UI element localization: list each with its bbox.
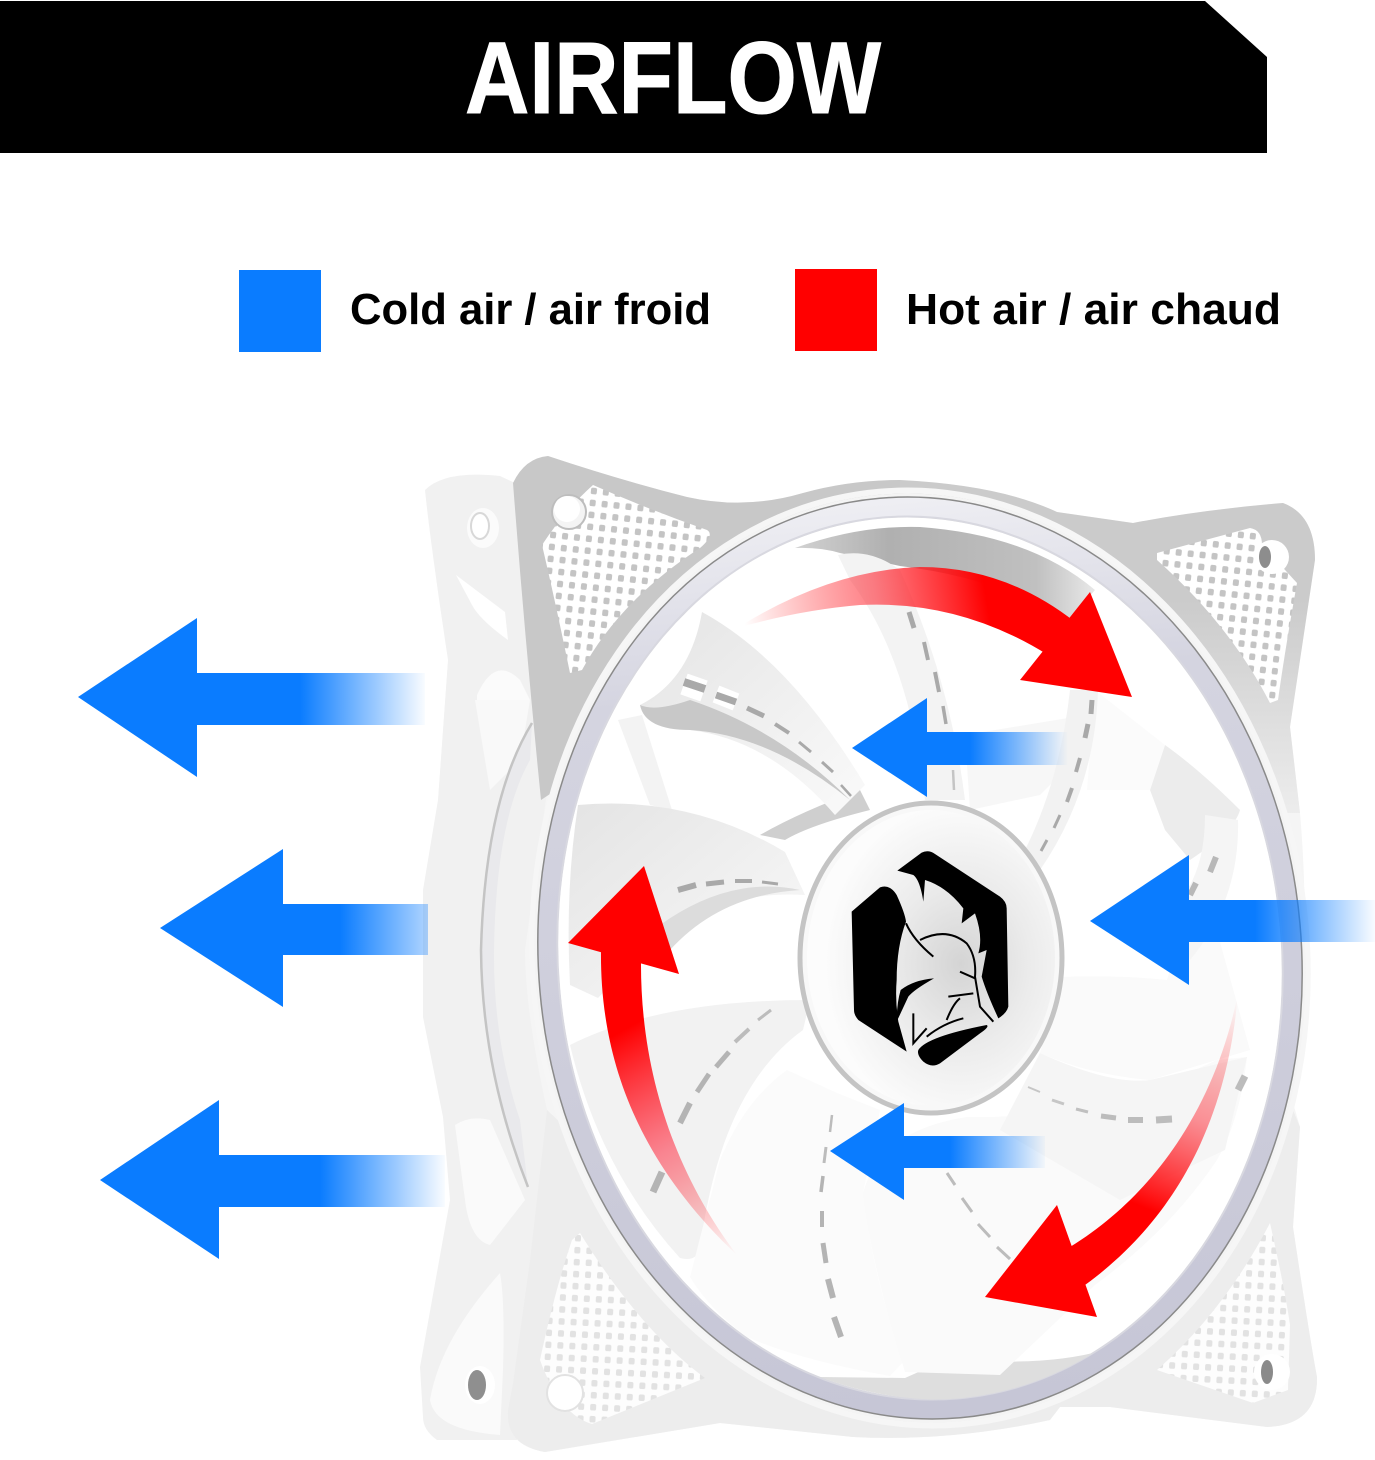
fan illustration	[420, 456, 1346, 1458]
blade: lower-right	[918, 1358, 1014, 1375]
mesh panel: bottom-left	[540, 1233, 705, 1424]
arrow: cold air through upper	[852, 698, 1068, 797]
blade: upper-left	[640, 612, 865, 815]
grey frame shading: top-right	[900, 480, 1315, 813]
legend: hot air: Hot air / air chaud	[906, 285, 1281, 334]
mesh panel: bottom-right	[1157, 1223, 1290, 1403]
fan blades	[569, 527, 1250, 1400]
fan hub	[800, 803, 1062, 1113]
blade strip: far right	[1189, 816, 1238, 900]
legend: cold air	[239, 270, 711, 352]
screw: bottom-left	[547, 1375, 583, 1411]
legend: cold air: Cold air / air froid	[350, 285, 711, 334]
bottom crescent shadow	[821, 1354, 1090, 1398]
arrow: cold air out bottom	[100, 1100, 445, 1259]
top crescent shadow	[795, 527, 1095, 622]
blade strip: upper right	[1025, 690, 1098, 870]
title: AIRFLOW	[465, 21, 882, 135]
blade: right lower band	[1008, 1054, 1228, 1151]
blade: left	[569, 804, 805, 998]
arrow: hot air left	[568, 866, 737, 1255]
fan interior	[522, 487, 1318, 1429]
title banner	[0, 1, 1267, 153]
arrow: hot air bottom right	[985, 993, 1238, 1317]
blade dashes	[653, 612, 1245, 1337]
front frame	[508, 456, 1317, 1452]
screw: top-left	[552, 495, 586, 529]
mesh panel: top-left	[542, 485, 710, 673]
arrow: cold air in right	[1090, 855, 1375, 985]
screw hole: top-right	[1255, 540, 1289, 574]
grey frame shading: top-left	[513, 456, 900, 800]
blade: flat behind upper blue arrow	[965, 718, 1068, 810]
arrow: cold air out middle	[160, 849, 428, 1007]
fan ring	[494, 458, 1346, 1458]
arrow: cold air through lower	[830, 1103, 1045, 1200]
mesh panel: top-right	[1157, 528, 1297, 703]
legend: hot air	[795, 269, 1281, 351]
back struts	[618, 715, 672, 810]
arrow: cold air out top	[78, 618, 425, 777]
blade: lower-left	[570, 1000, 810, 1259]
blade strip: upper centre	[838, 553, 965, 800]
hub logo	[852, 851, 1008, 1065]
blade: right	[1040, 870, 1250, 1080]
grey frame shading: bottom	[508, 1103, 1317, 1452]
blade: bottom	[696, 1228, 703, 1256]
arrow: hot air top	[737, 567, 1132, 697]
screw hole: bottom-right	[1254, 1354, 1290, 1390]
back frame	[420, 475, 560, 1440]
